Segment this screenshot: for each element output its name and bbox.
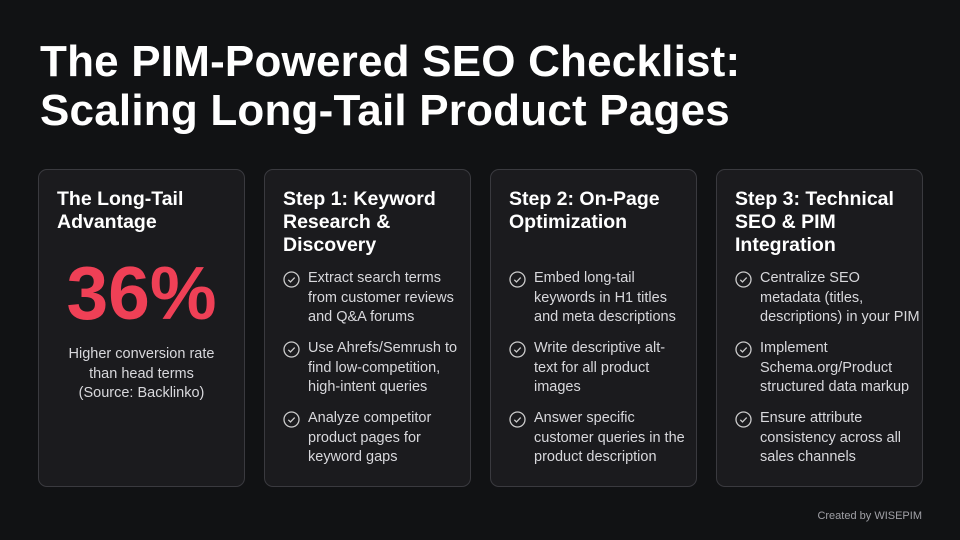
item: product description: [534, 449, 657, 465]
item: [509, 410, 685, 465]
item: [509, 340, 665, 395]
item: find low-competition,: [308, 360, 440, 376]
item: text for all product: [534, 360, 649, 376]
item: structured data markup: [760, 379, 909, 395]
item: and meta descriptions: [534, 309, 676, 325]
item: Answer specific: [534, 410, 635, 426]
panel: long-tail advantage: [38, 169, 245, 487]
stat caption: Higher conversion rate: [69, 346, 214, 362]
item: Embed long-tail: [534, 270, 635, 286]
heading: The Long-Tail Advantage: [57, 188, 183, 233]
heading: Step 2: On-Page Optimization: [509, 188, 660, 233]
item: descriptions) in your PIM: [760, 309, 920, 325]
panel: step 3: [716, 169, 923, 487]
item: [283, 270, 454, 325]
item: high-intent queries: [308, 379, 427, 395]
title: The PIM-Powered SEO Checklist:: [40, 37, 740, 86]
item: metadata (titles,: [760, 290, 863, 306]
item: [735, 410, 901, 465]
stat caption: [69, 346, 214, 401]
item: keyword gaps: [308, 449, 397, 465]
item: Implement: [760, 340, 828, 356]
item: from customer reviews: [308, 290, 454, 306]
item: Ensure attribute: [760, 410, 862, 426]
item: [735, 340, 909, 395]
item: [735, 270, 920, 325]
heading: Step 3: Technical SEO & PIM Integration: [735, 188, 894, 256]
title: Scaling Long-Tail Product Pages: [40, 86, 730, 135]
stat caption: than head terms: [89, 366, 194, 382]
item: Extract search terms: [308, 270, 441, 286]
stat caption: (Source: Backlinko): [79, 385, 204, 401]
item: product pages for: [308, 430, 421, 446]
item: sales channels: [760, 449, 856, 465]
item: and Q&A forums: [308, 309, 414, 325]
panel: step 2: [490, 169, 697, 487]
item: customer queries in the: [534, 430, 685, 446]
item: Analyze competitor: [308, 410, 431, 426]
item: Schema.org/Product: [760, 360, 892, 376]
item: images: [534, 379, 581, 395]
item: Write descriptive alt-: [534, 340, 665, 356]
item: [509, 270, 676, 325]
panel: step 1: [264, 169, 471, 487]
heading: Step 1: Keyword Research & Discovery: [283, 188, 436, 256]
title: [40, 37, 740, 135]
item: [283, 410, 432, 465]
item: Use Ahrefs/Semrush to: [308, 340, 457, 356]
item: keywords in H1 titles: [534, 290, 667, 306]
item: Centralize SEO: [760, 270, 860, 286]
footer credit: Created by WISEPIM: [817, 510, 922, 522]
item: [283, 340, 457, 395]
stat: 36%: 36%: [66, 251, 217, 335]
item: consistency across all: [760, 430, 901, 446]
